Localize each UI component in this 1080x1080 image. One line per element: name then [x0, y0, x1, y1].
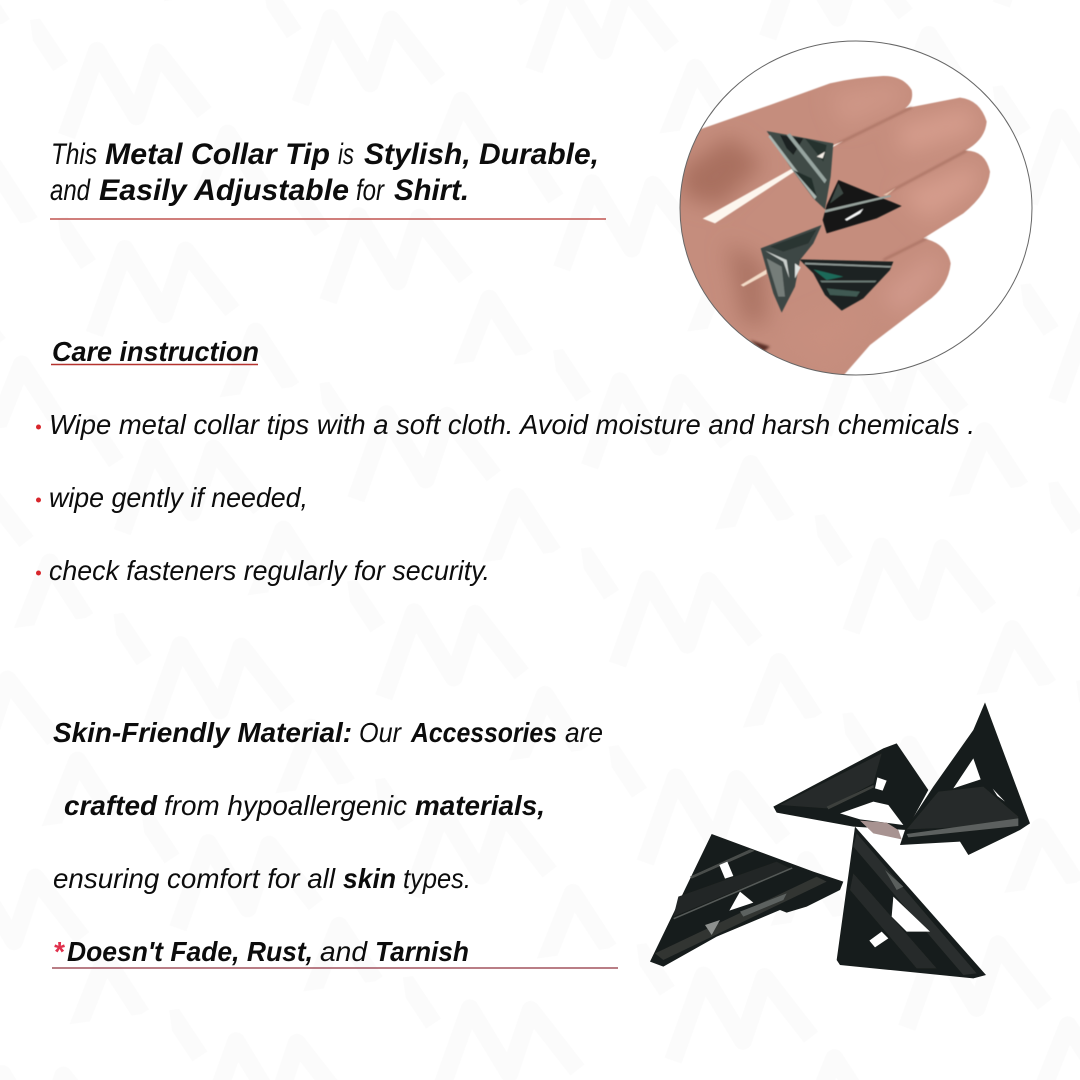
headline with red rule: and: [50, 174, 91, 207]
tip four: [799, 259, 893, 311]
headline with red rule: Stylish, Durable,: [364, 138, 599, 171]
photo: four black metal collar tips: [650, 702, 1030, 978]
skin-friendly material text block: materials,: [415, 790, 545, 821]
tip three: [761, 225, 822, 313]
care instruction bullet list: [36, 409, 975, 586]
skin-friendly material text block: Skin-Friendly Material:: [53, 717, 352, 748]
tip two: [823, 180, 902, 233]
skin-friendly material text block: are: [565, 717, 603, 748]
headline with red rule: is: [338, 138, 354, 171]
small coin-like reflection: [860, 821, 902, 839]
collar tip left: [650, 834, 843, 967]
headline with red rule: This: [51, 138, 97, 171]
skin-friendly material text block: [52, 717, 618, 968]
headline with red rule: for: [356, 174, 385, 207]
skin-friendly material text block: crafted: [64, 790, 158, 821]
skin-friendly material text block: ensuring comfort for all: [53, 863, 336, 894]
gaps between fingers: [703, 141, 896, 287]
collar tip right: [900, 702, 1030, 855]
headline with red rule: Easily Adjustable: [99, 174, 349, 207]
skin-friendly material text block: from hypoallergenic: [164, 790, 407, 821]
skin-friendly material text block: Tarnish: [375, 936, 469, 967]
care instruction bullet list: wipe gently if needed,: [49, 482, 308, 513]
skin-friendly material text block: *: [53, 936, 65, 967]
care instruction bullet list: check fasteners regularly for security.: [49, 555, 490, 586]
skin-friendly material text block: Our: [359, 717, 402, 748]
headline with red rule: Metal Collar Tip: [105, 138, 330, 171]
skin-friendly material text block: Accessories: [410, 717, 557, 748]
headline with red rule: Shirt.: [394, 174, 469, 207]
heading: care instruction: Care instruction: [52, 336, 259, 367]
photo: hand holding four collar tips in a circle: [670, 41, 1032, 390]
headline with red rule: [50, 138, 606, 219]
skin-friendly material text block: and: [320, 936, 368, 967]
skin-friendly material text block: skin: [343, 863, 396, 894]
skin-friendly material text block: types.: [403, 863, 471, 894]
hand silhouette: [670, 76, 990, 390]
care instruction bullet list: Wipe metal collar tips with a soft cloth. Avoid moisture and harsh chemicals .: [49, 409, 975, 440]
collar tip back centre: [773, 743, 928, 830]
tip one: [767, 131, 833, 209]
skin-friendly material text block: Doesn't Fade, Rust,: [67, 936, 313, 967]
collar tip bottom: [837, 827, 986, 978]
circle outline: [680, 41, 1032, 375]
